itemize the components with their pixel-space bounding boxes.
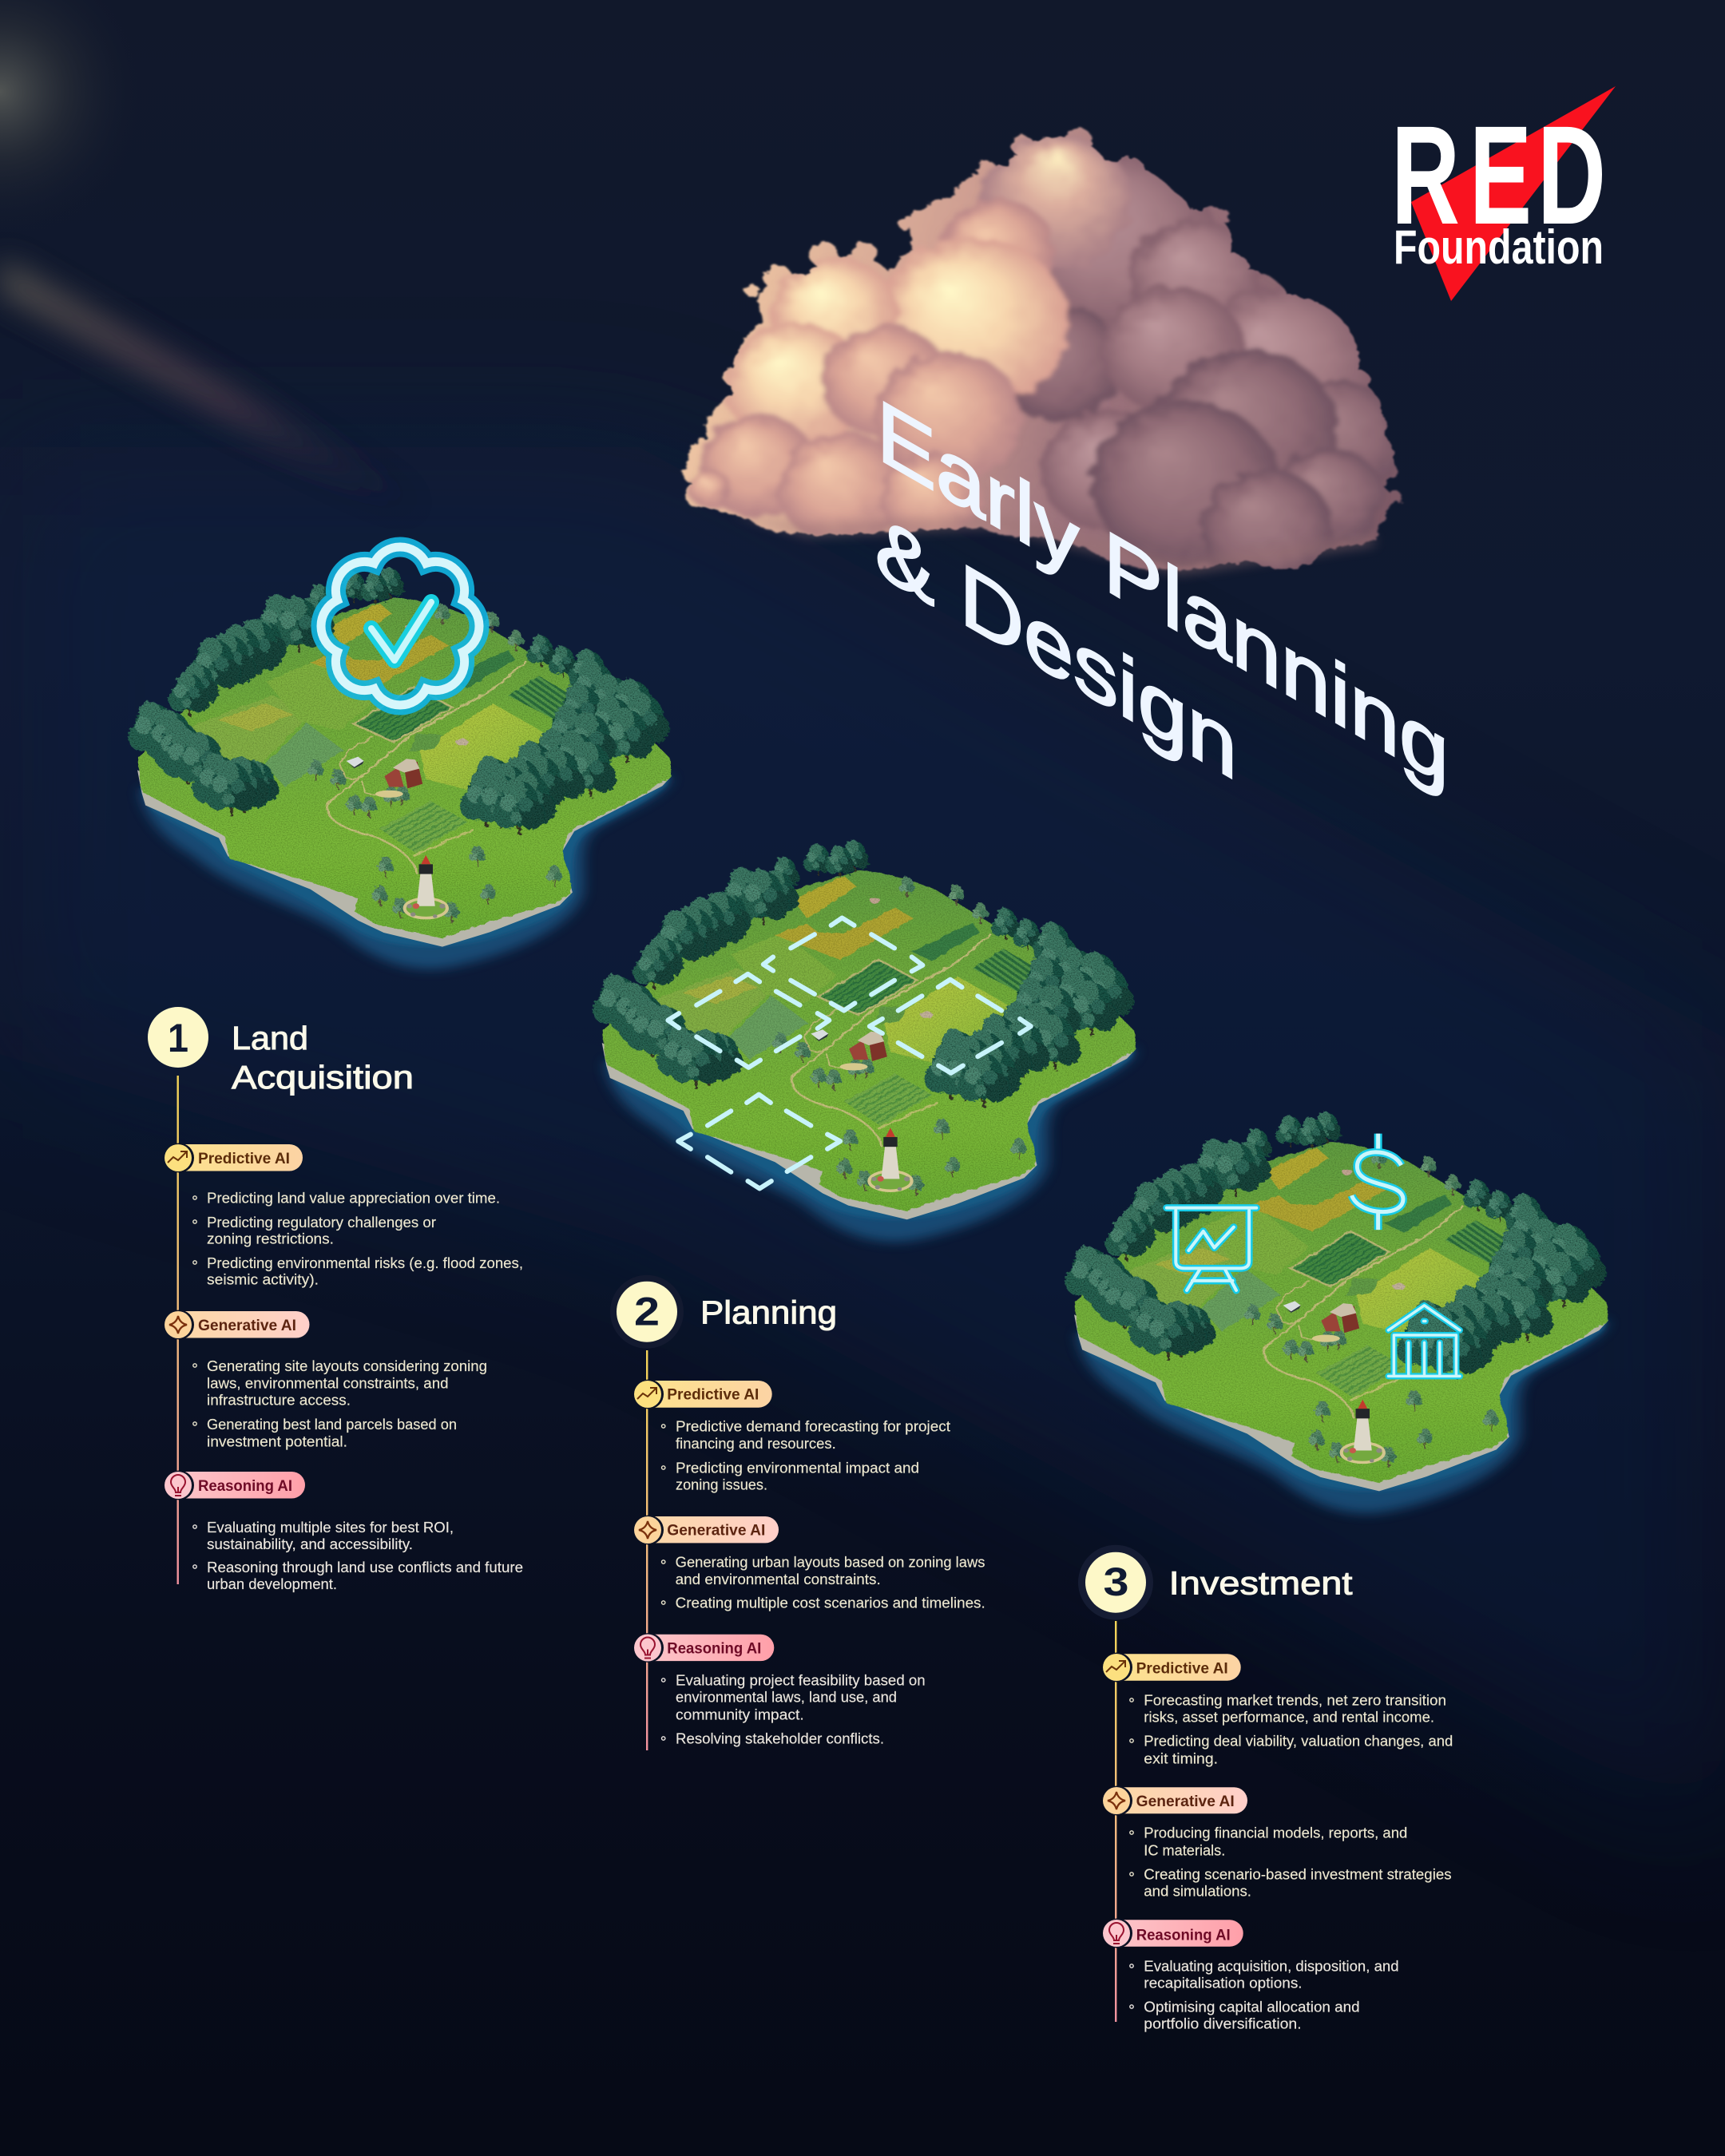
tag: predictive AI: Predictive AI [198, 1151, 290, 1167]
timeline line [1115, 1621, 1116, 2022]
panel: step 3 investment [1078, 1545, 1453, 2031]
reasoning bullets [1130, 1958, 1399, 2031]
predictive bullets: Predicting environmental risks (e.g. flood zones, [207, 1255, 523, 1271]
tag: reasoning AI [634, 1633, 774, 1663]
title: Early Planning & Design: Early Planning [877, 379, 1449, 806]
generative bullets [1130, 1825, 1452, 1899]
predictive bullets: Predicting land value appreciation over time. [207, 1190, 500, 1206]
reasoning bullets: community impact. [676, 1706, 804, 1722]
logo: RED Foundation: D [1537, 97, 1606, 254]
tag: reasoning AI [1103, 1918, 1243, 1948]
panel: step 1 land acquisition [148, 1007, 523, 1592]
predictive bullets: Predictive demand forecasting for project [676, 1418, 950, 1434]
predictive bullets: Forecasting market trends, net zero transition [1144, 1692, 1446, 1708]
predictive bullets: risks, asset performance, and rental income. [1144, 1710, 1434, 1726]
generative bullets: Creating multiple cost scenarios and timelines. [676, 1595, 985, 1611]
tag: generative AI [634, 1516, 779, 1544]
logo: RED Foundation: R [1391, 97, 1460, 254]
logo: RED Foundation: E [1469, 97, 1532, 254]
tag: reasoning AI: Reasoning AI [1136, 1927, 1231, 1944]
island 2: planning [593, 840, 1138, 1242]
tag: reasoning AI: Reasoning AI [667, 1641, 761, 1658]
tag: predictive AI [165, 1143, 303, 1172]
timeline line [646, 1350, 648, 1750]
generative bullets [661, 1554, 985, 1611]
island 3: investment [1065, 1112, 1610, 1513]
reasoning bullets: Reasoning through land use conflicts and future [207, 1560, 523, 1575]
tag: generative AI: Generative AI [1136, 1793, 1235, 1810]
generative bullets: investment potential. [207, 1434, 347, 1450]
heading: Investment [1169, 1565, 1353, 1602]
icon: presentation board [1167, 1208, 1256, 1290]
generative bullets: infrastructure access. [207, 1393, 351, 1409]
logo: RED Foundation: Foundation [1394, 220, 1604, 274]
heading: Acquisition [232, 1059, 414, 1096]
logo: RED Foundation [1391, 86, 1616, 301]
predictive bullets [1130, 1692, 1453, 1766]
reasoning bullets: portfolio diversification. [1144, 2015, 1302, 2031]
predictive bullets: zoning restrictions. [207, 1231, 334, 1247]
tag: predictive AI [1103, 1653, 1241, 1682]
reasoning bullets: Evaluating multiple sites for best ROI, [207, 1520, 454, 1536]
predictive bullets [193, 1190, 523, 1287]
heading [232, 1020, 414, 1096]
number badge 3: 3 [1104, 1560, 1129, 1604]
predictive bullets: seismic activity). [207, 1271, 319, 1287]
reasoning bullets: Optimising capital allocation and [1144, 1999, 1360, 2015]
number badge 3 [1078, 1545, 1153, 1620]
panel: step 2 planning [610, 1275, 985, 1750]
island 1: land acquisition [129, 547, 673, 969]
generative bullets: Producing financial models, reports, and [1144, 1825, 1407, 1841]
predictive bullets: exit timing. [1144, 1750, 1218, 1766]
predictive bullets: zoning issues. [676, 1476, 767, 1492]
reasoning bullets [661, 1672, 926, 1746]
predictive bullets [661, 1418, 950, 1492]
generative bullets: Creating scenario-based investment strategies [1144, 1867, 1452, 1883]
icon: verified badge [321, 547, 479, 705]
reasoning bullets: Evaluating project feasibility based on [676, 1672, 926, 1688]
generative bullets: Generating site layouts considering zoning [207, 1358, 487, 1374]
number badge 2 [610, 1275, 684, 1349]
generative bullets: and simulations. [1144, 1883, 1251, 1899]
tag: reasoning AI [165, 1471, 305, 1500]
heading: Planning [700, 1294, 837, 1331]
reasoning bullets: urban development. [207, 1576, 337, 1592]
generative bullets: Generating best land parcels based on [207, 1417, 457, 1433]
tag: generative AI [1103, 1785, 1247, 1816]
predictive bullets: Predicting environmental impact and [676, 1460, 919, 1476]
tag: predictive AI [634, 1380, 772, 1409]
generative bullets [193, 1358, 487, 1450]
reasoning bullets: environmental laws, land use, and [676, 1689, 897, 1705]
predictive bullets: Predicting regulatory challenges or [207, 1215, 436, 1231]
reasoning bullets: sustainability, and accessibility. [207, 1536, 413, 1552]
heading: Land [232, 1020, 308, 1056]
dashed parcel outlines [668, 918, 1031, 1188]
reasoning bullets: Evaluating acquisition, disposition, and [1144, 1958, 1399, 1974]
reasoning bullets: Resolving stakeholder conflicts. [676, 1730, 884, 1746]
generative bullets: Generating urban layouts based on zoning laws [676, 1554, 985, 1570]
reasoning bullets: recapitalisation options. [1144, 1975, 1303, 1991]
generative bullets: laws, environmental constraints, and [207, 1376, 449, 1392]
tag: generative AI [165, 1310, 310, 1340]
predictive bullets: financing and resources. [676, 1436, 836, 1452]
icon: bank building [1389, 1306, 1460, 1376]
timeline line [177, 1076, 179, 1584]
icon: dollar sign [1352, 1134, 1403, 1230]
generative bullets: and environmental constraints. [676, 1571, 881, 1587]
number badge 1 [148, 1007, 208, 1068]
tag: generative AI: Generative AI [667, 1523, 765, 1540]
title: Early Planning & Design: & Design [875, 494, 1237, 800]
number badge 2: 2 [634, 1289, 660, 1334]
tag: predictive AI: Predictive AI [667, 1387, 759, 1404]
predictive bullets: Predicting deal viability, valuation changes, and [1144, 1734, 1453, 1750]
tag: reasoning AI: Reasoning AI [198, 1478, 292, 1495]
reasoning bullets [193, 1520, 523, 1592]
generative bullets: IC materials. [1144, 1842, 1225, 1858]
cloud [683, 128, 1405, 587]
number badge 1: 1 [168, 1016, 188, 1060]
tag: predictive AI: Predictive AI [1136, 1661, 1228, 1678]
tag: generative AI: Generative AI [198, 1318, 296, 1334]
